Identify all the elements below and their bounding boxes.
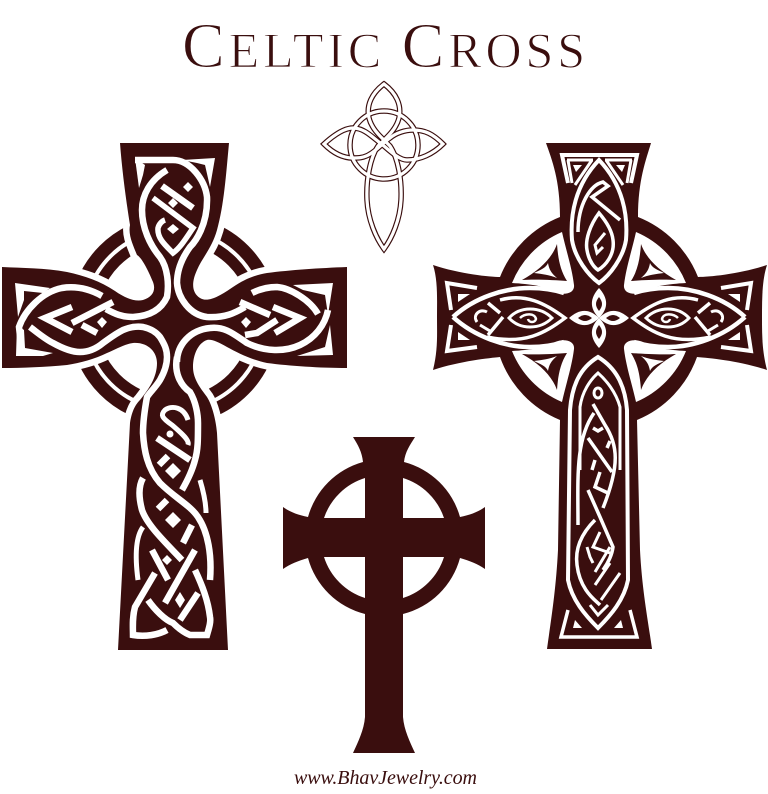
left cross corner wedges (15, 158, 333, 356)
right cross silhouette (433, 143, 767, 649)
left cross diamonds (97, 182, 251, 608)
right knotwork cross (433, 143, 767, 649)
left cross silhouette (2, 143, 347, 650)
left knotwork cross (2, 143, 347, 650)
right cross arm panels (447, 283, 751, 351)
right cross quadrant cutouts (512, 232, 686, 402)
small knot cross icon (324, 84, 443, 249)
right cross shaft panel (561, 357, 637, 637)
plain cross (283, 437, 485, 753)
title: CELTIC CROSS (182, 10, 585, 81)
right cross centre flower (569, 288, 629, 348)
left cross knotwork bands (19, 160, 328, 636)
right cross top panel (562, 155, 637, 283)
left cross ring (76, 222, 272, 418)
website footer: www.BhavJewelry.com (294, 767, 477, 789)
